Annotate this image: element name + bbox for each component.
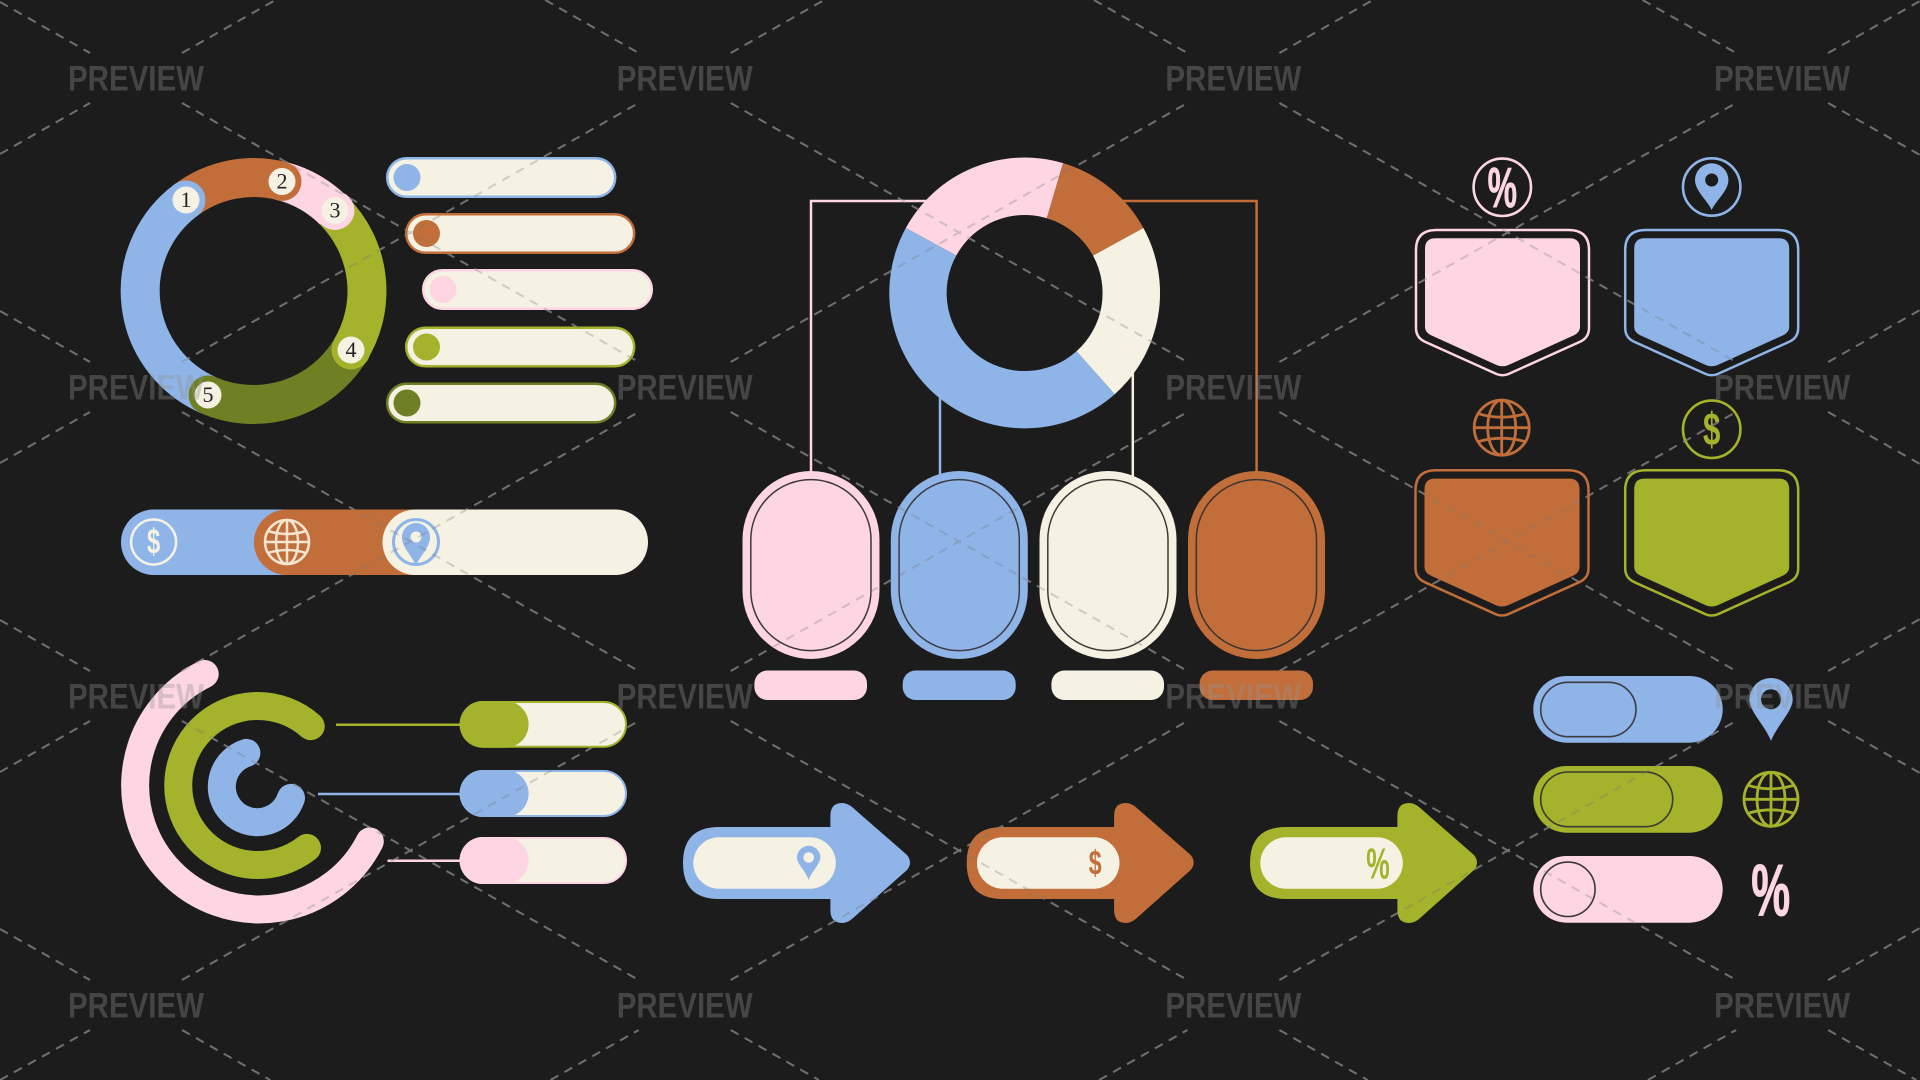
marker 1: 1 <box>180 187 192 212</box>
watermark: PREVIEW labels: PREVIEW <box>1714 678 1850 717</box>
watermark: PREVIEW labels: PREVIEW <box>1165 60 1301 99</box>
icon: percent in circle <box>1474 156 1531 219</box>
bar segment: cream <box>382 510 648 575</box>
donut slice: pink <box>906 158 1063 256</box>
label pill: pink <box>754 670 867 700</box>
shield: blue <box>1625 230 1798 375</box>
icon: dollar in circle <box>1683 401 1740 458</box>
watermark: PREVIEW labels: PREVIEW <box>68 369 204 408</box>
legend pill 3 <box>423 270 652 309</box>
arrow: dollar <box>967 803 1194 923</box>
shield: brown <box>1416 470 1588 616</box>
panel: concentric arc chart <box>135 674 626 909</box>
capsule: cream <box>1040 471 1176 659</box>
arrow: location <box>683 803 910 923</box>
legend pill 2 <box>406 214 634 253</box>
icon: location <box>797 846 820 880</box>
donut slice: cream <box>1076 228 1160 394</box>
shield: pink <box>1416 230 1589 375</box>
icon: dollar: $ <box>1089 845 1102 883</box>
watermark: PREVIEW labels: PREVIEW <box>617 987 753 1026</box>
ring segment: pink <box>282 181 334 211</box>
arc: pink <box>135 674 370 909</box>
ring segment: dark green <box>208 350 351 405</box>
panel: toggle pills with icons <box>1533 676 1798 931</box>
watermark: PREVIEW labels: PREVIEW <box>617 369 753 408</box>
marker 5: 5 <box>202 382 214 407</box>
ring segment: brown <box>186 177 282 200</box>
legend pill 4 <box>406 328 634 366</box>
legend pill 1 <box>387 158 615 197</box>
marker 2: 2 <box>276 168 288 194</box>
connector: brown <box>1120 201 1257 472</box>
value pill: pink <box>460 837 626 884</box>
panel: stacked progress bar with icons <box>121 510 648 575</box>
watermark: PREVIEW labels: PREVIEW <box>68 60 204 99</box>
panel: central donut with four capsules <box>742 158 1325 700</box>
icon: globe <box>1744 772 1798 826</box>
label pill: cream <box>1051 670 1164 700</box>
connector: cream <box>1132 370 1134 478</box>
badge: dollar <box>1625 401 1798 616</box>
marker 3: 3 <box>330 198 340 222</box>
label pill: brown <box>1200 670 1313 700</box>
connector: pink <box>388 859 462 862</box>
icon: dollar in circle: $ <box>1703 404 1720 456</box>
ring segment: blue <box>140 200 208 395</box>
icon: percent: % <box>1366 838 1390 888</box>
watermark: PREVIEW labels: PREVIEW <box>1165 369 1301 408</box>
badge: location <box>1625 158 1798 375</box>
toggle: pink <box>1533 856 1723 923</box>
panel: arrow row <box>683 803 1477 923</box>
value pill: blue <box>460 770 626 817</box>
watermark: PREVIEW labels: PREVIEW <box>1714 369 1850 408</box>
icon: percent in circle: % <box>1488 156 1517 219</box>
icon: dollar <box>131 520 176 564</box>
panel: ring legend pills <box>387 158 652 422</box>
watermark: PREVIEW labels: PREVIEW <box>1714 987 1850 1026</box>
capsule: pink <box>742 471 880 659</box>
marker 4 <box>332 330 370 370</box>
panel: segmented numbered ring <box>140 162 370 414</box>
icon: globe <box>1474 400 1529 455</box>
arc: blue <box>222 753 291 822</box>
connector: blue <box>939 390 941 476</box>
icon: dollar: $ <box>147 523 161 562</box>
watermark: PREVIEW labels: PREVIEW <box>1714 60 1850 99</box>
toggle: green <box>1533 766 1723 833</box>
arrow: percent <box>1250 803 1477 923</box>
icon: percent: % <box>1751 850 1790 931</box>
bar segment: brown <box>254 510 444 575</box>
capsule: blue <box>891 471 1028 659</box>
arc: green <box>178 706 311 865</box>
connector: green <box>336 723 462 726</box>
ring segment: green <box>334 211 367 350</box>
watermark: PREVIEW labels: PREVIEW <box>617 678 753 717</box>
panel: shield badges <box>1416 156 1798 616</box>
label pill: blue <box>903 670 1016 700</box>
bar segment: blue <box>121 510 331 575</box>
icon: location <box>1749 678 1793 741</box>
donut slice: blue <box>889 228 1115 428</box>
donut slice: brown <box>1047 163 1143 256</box>
icon: location in circle <box>1683 158 1740 216</box>
badge: percent <box>1416 156 1589 375</box>
marker 2 <box>262 162 302 201</box>
watermark: PREVIEW labels: PREVIEW <box>617 60 753 99</box>
icon: globe <box>265 520 309 564</box>
marker 3 <box>316 191 354 230</box>
connector: pink <box>811 201 930 471</box>
watermark: PREVIEW labels: PREVIEW <box>68 987 204 1026</box>
shield: green <box>1625 470 1798 616</box>
value pill: green <box>460 701 626 748</box>
watermark: PREVIEW labels: PREVIEW <box>1165 678 1301 717</box>
donut chart <box>889 158 1160 428</box>
capsule: brown <box>1188 471 1325 659</box>
watermark: PREVIEW labels: PREVIEW <box>68 678 204 717</box>
toggle: blue <box>1533 676 1723 743</box>
marker 1 <box>166 180 206 220</box>
legend pill 5 <box>387 384 615 422</box>
watermark: PREVIEW labels: PREVIEW <box>1165 987 1301 1026</box>
icon: location <box>394 520 438 566</box>
badge: globe <box>1416 400 1588 616</box>
marker 5 <box>188 376 228 414</box>
marker 4: 4 <box>346 337 356 362</box>
connector: blue <box>318 793 462 795</box>
